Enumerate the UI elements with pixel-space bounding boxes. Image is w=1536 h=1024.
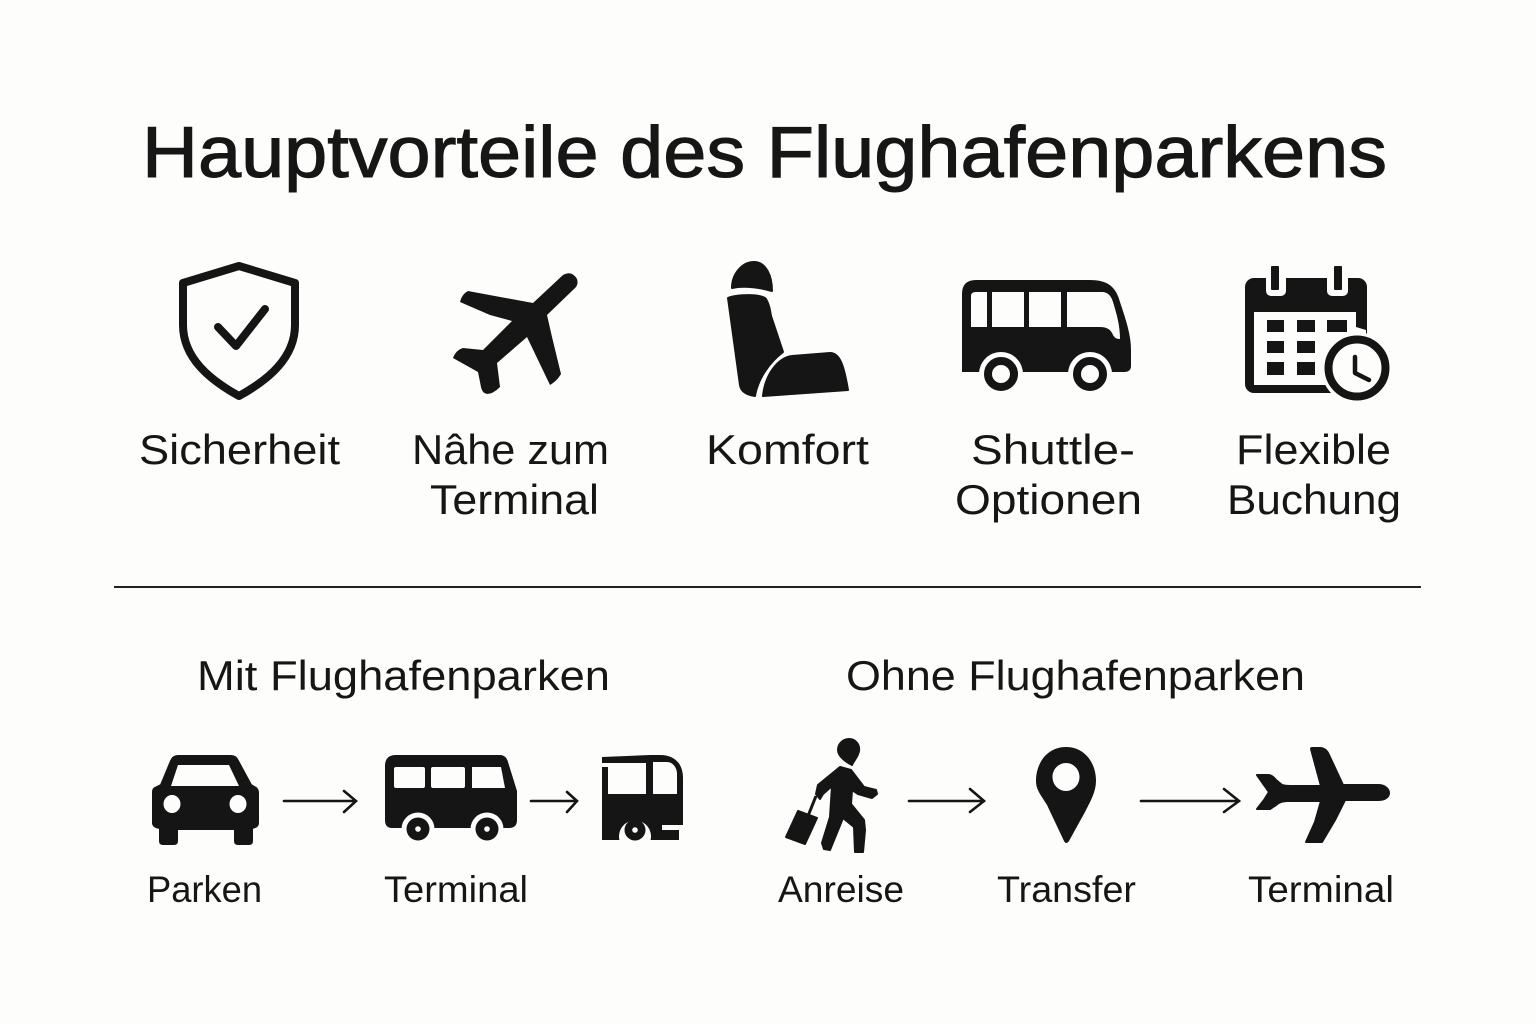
icon: bus xyxy=(385,755,520,847)
label: Sicherheit: Sicherheit xyxy=(139,426,340,473)
arrow xyxy=(284,791,356,812)
panel: without airport parking xyxy=(778,652,1394,910)
icon: calendar with clock xyxy=(1245,266,1393,404)
icon: shield with check xyxy=(183,266,295,396)
label: Terminal: Terminal xyxy=(1248,869,1394,910)
heading: Mit Flughafenparken: Mit Flughafenparken xyxy=(197,652,610,699)
icon: bus rear section xyxy=(600,755,690,846)
title: Hauptvorteile des Flughafenparkens xyxy=(142,113,1387,193)
icon: shuttle bus xyxy=(962,280,1131,396)
arrow xyxy=(531,792,577,812)
label: Nähe zum Terminal xyxy=(412,426,609,523)
label: Shuttle-Optionen xyxy=(955,426,1142,523)
label: Nähe zum Terminal: Nâhe zum xyxy=(412,426,609,473)
label: Flexible Buchung: Flexible xyxy=(1236,426,1391,473)
icon: location pin xyxy=(1036,747,1096,843)
label: Transfer: Transfer xyxy=(997,869,1136,910)
arrow xyxy=(1141,789,1239,812)
label: Anreise: Anreise xyxy=(778,869,904,910)
icon: seat xyxy=(728,262,848,396)
heading: Ohne Flughafenparken: Ohne Flughafenparken xyxy=(846,652,1305,699)
label: Shuttle-Optionen: Optionen xyxy=(955,476,1142,523)
panel: benefits xyxy=(139,262,1401,523)
icon: airplane xyxy=(453,273,578,394)
label: Nähe zum Terminal: Terminal xyxy=(430,476,599,523)
label: Terminal: Terminal xyxy=(384,869,528,910)
icon: car xyxy=(153,756,258,844)
label: Shuttle-Optionen: Shuttle- xyxy=(971,426,1135,473)
arrow xyxy=(909,789,984,812)
label: Flexible Buchung: Buchung xyxy=(1227,476,1401,523)
label: Parken: Parken xyxy=(147,869,262,910)
icon: airplane side xyxy=(1257,748,1389,842)
icon: traveller with suitcase xyxy=(786,739,877,852)
label: Komfort: Komfort xyxy=(706,426,869,473)
label: Flexible Buchung xyxy=(1227,426,1401,523)
panel: with airport parking xyxy=(147,652,690,910)
